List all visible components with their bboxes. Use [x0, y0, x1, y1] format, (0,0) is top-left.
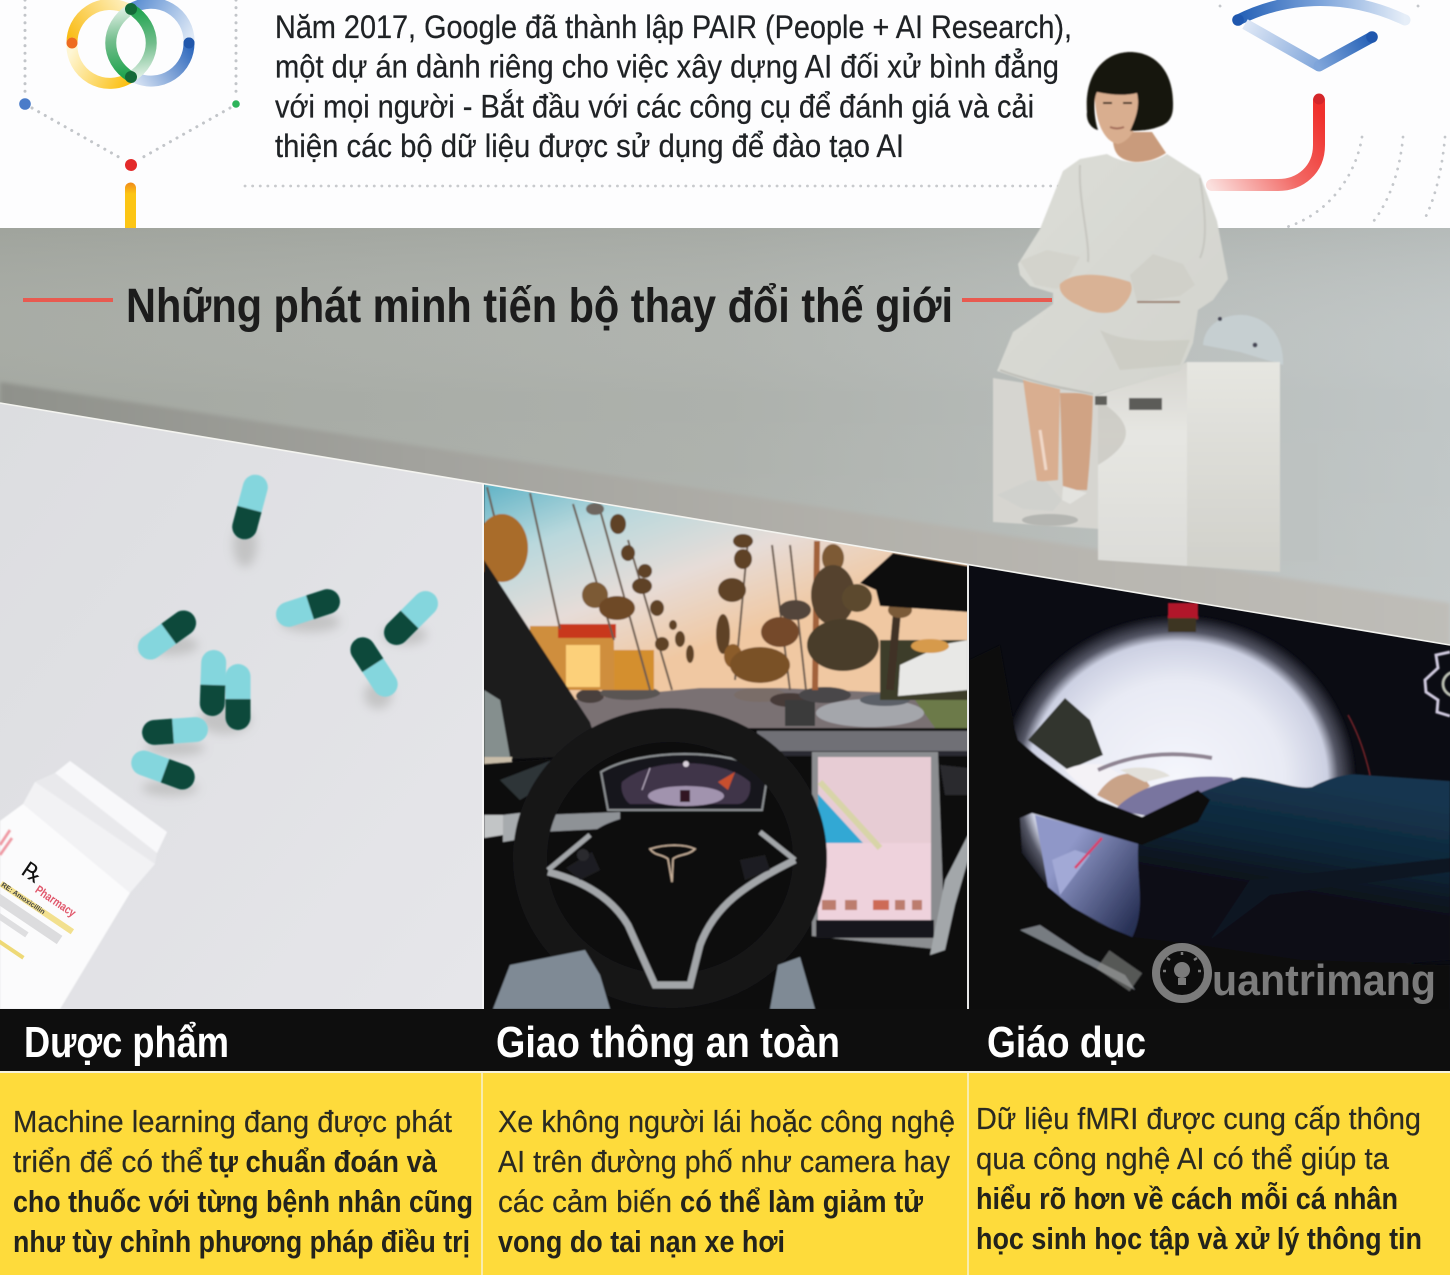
instrument cluster [601, 754, 768, 810]
text block: pharmaceutical description: như tùy chỉnh phương pháp điều trị [13, 1224, 470, 1259]
tesla logo [650, 845, 695, 882]
rear view mirror [860, 553, 968, 612]
white box seat [993, 362, 1280, 572]
text block: intro paragraph: một dự án dành riêng cho việc xây dựng AI đối xử bình đẳng [275, 48, 1059, 84]
text block: pharmaceutical description [13, 1104, 473, 1259]
steering wheel rim [530, 725, 810, 991]
bed sheet [1034, 814, 1142, 938]
legs and shoes [997, 379, 1093, 526]
heading: Giao thông an toàn: Giao thông an toàn [496, 1018, 840, 1067]
heading: Dược phẩm: Dược phẩm [24, 1018, 229, 1067]
text block: pharmaceutical description: tự chuẩn đoán và [209, 1144, 438, 1179]
patient head and goggle arc [1066, 764, 1101, 794]
head with black bob hair [1087, 52, 1173, 162]
icon: people plus AI logo circles [66, 3, 194, 83]
text block: intro paragraph: thiện các bộ dữ liệu được sử dụng để đào tạo AI [275, 128, 904, 164]
pill bottle [0, 761, 167, 1009]
heading: section title: Những phát minh tiến bộ thay đổi thế giới [126, 280, 953, 333]
dashboard trim [757, 731, 968, 751]
image panel: pharmaceutical capsules and pill bottle [0, 400, 482, 1010]
text block: safe transport description: Xe không người lái hoặc công nghệ [498, 1104, 955, 1139]
text block: safe transport description: các cảm biến [498, 1184, 672, 1219]
gear [1425, 652, 1450, 716]
text block: pharmaceutical description: triển để có thể [13, 1144, 203, 1179]
image panel: fMRI scanner [969, 560, 1450, 1010]
dress [997, 154, 1228, 396]
text block: education description [976, 1101, 1422, 1256]
icon: top-right blue and red logo fragment [1212, 0, 1445, 227]
image: robot Kodomoroid sitting on white box [993, 52, 1318, 572]
bottle label: Pharmacy [33, 882, 79, 920]
blue blanket [1132, 774, 1450, 975]
watermark: Quantrimang logo [1156, 947, 1436, 1005]
text block: education description: qua công nghệ AI có thể giúp ta [976, 1141, 1390, 1176]
text block: pharmaceutical description: Machine learning đang được phát [13, 1104, 452, 1139]
text block: intro paragraph [275, 9, 1072, 164]
sky [484, 484, 967, 701]
jeans [493, 950, 610, 1009]
scanner bore [1000, 615, 1356, 945]
panel: grey robot band background [0, 228, 1450, 660]
white header background [0, 0, 1450, 228]
bottle label: RE: Amoxicillin [0, 882, 46, 916]
text block: intro paragraph: Năm 2017, Google đã thành lập PAIR (People + AI Research), [275, 9, 1072, 45]
palm trunks [487, 487, 897, 690]
bottle label [0, 861, 76, 960]
palm fronds [476, 503, 912, 683]
text block: education description: hiểu rõ hơn về cách mỗi cá nhân [976, 1181, 1398, 1216]
text block: intro paragraph: với mọi người - Bắt đầu với các công cụ để đánh giá và cải [275, 88, 1034, 124]
building [530, 626, 614, 690]
dark foreground arm and silhouette [969, 645, 1450, 1010]
road, hedge and cars [570, 688, 968, 728]
pill shadows [142, 523, 427, 796]
text block: safe transport description: vong do tai nạn xe hơi [498, 1224, 785, 1259]
a-pillar and side window [484, 560, 600, 760]
centre touchscreen [812, 752, 945, 950]
bottle label: ℞ [17, 857, 48, 889]
back small box [1282, 443, 1318, 561]
heading: Giáo dục: Giáo dục [987, 1018, 1146, 1067]
capsules [128, 472, 443, 793]
text block: safe transport description: AI trên đường phố như camera hay [498, 1144, 950, 1179]
image panel: self-driving car interior [476, 480, 968, 1010]
watermark: Quantrimang logo: uantrimang [1212, 956, 1436, 1005]
text block: pharmaceutical description: cho thuốc với từng bệnh nhân cũng [13, 1184, 473, 1219]
text block: safe transport description [498, 1104, 955, 1259]
helmet [1203, 315, 1283, 365]
text block: education description: Dữ liệu fMRI được cung cấp thông [976, 1101, 1421, 1136]
hands [1060, 275, 1132, 313]
panel: yellow description band [0, 1071, 1450, 1275]
text block: safe transport description: có thể làm giảm tử [680, 1184, 923, 1219]
panel: black title band [0, 1009, 1450, 1071]
steering wheel hub [566, 818, 764, 980]
trees behind house and house [880, 640, 968, 700]
icon: dotted hexagon connector left [19, 0, 240, 228]
